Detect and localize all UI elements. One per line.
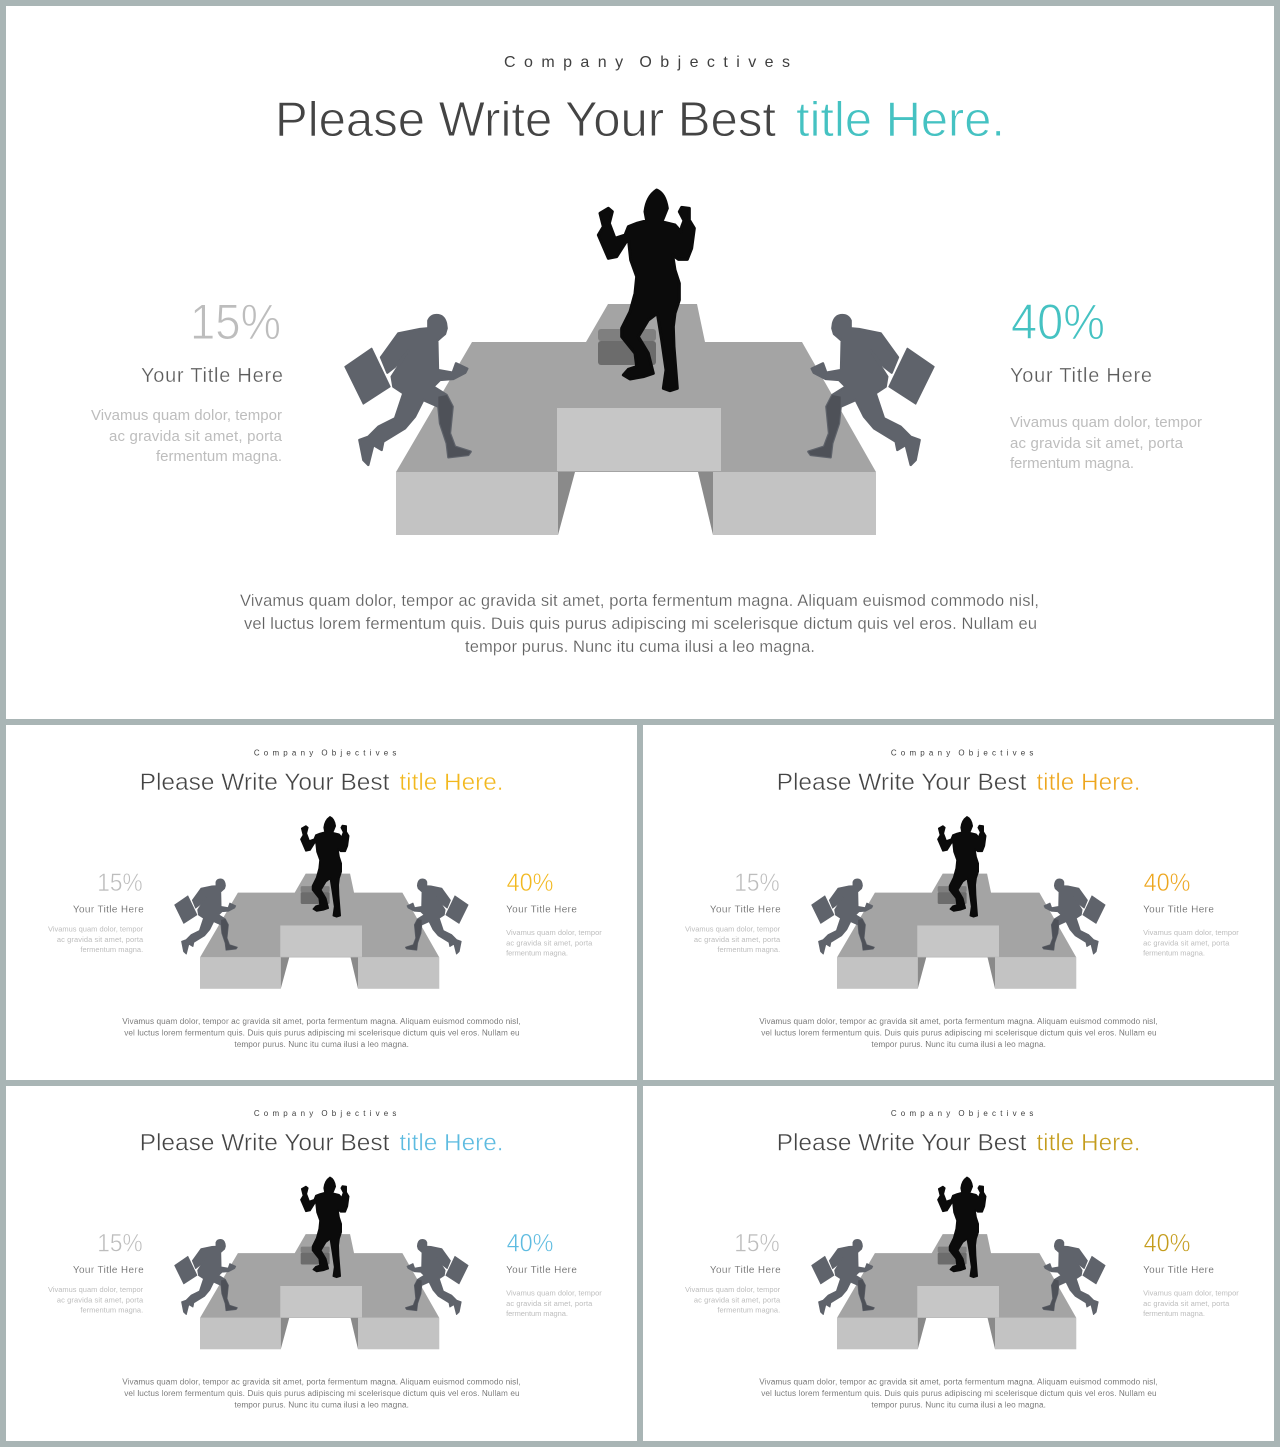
stat right: fermentum magna.: [1143, 948, 1205, 957]
stat right: Vivamus quam dolor, tempor: [1010, 414, 1202, 431]
stat left: Your Title Here: [710, 905, 781, 916]
body text: [759, 1378, 1158, 1410]
body text: tempor purus. Nunc itu cuma ilusi a leo magna.: [234, 1040, 409, 1049]
stat right: Your Title Here: [1143, 1265, 1214, 1276]
body text: Vivamus quam dolor, tempor ac gravida sit amet, porta fermentum magna. Aliquam euismod commodo nisl,: [122, 1017, 521, 1026]
stat left: fermentum magna.: [717, 1305, 780, 1314]
stat left: [48, 869, 144, 954]
stat left: Your Title Here: [73, 1265, 144, 1276]
body text: vel luctus lorem fermentum quis. Duis quis purus adipiscing mi scelerisque dictum quis vel eros. Nullam eu: [124, 1389, 520, 1398]
stat right: ac gravida sit amet, porta: [1010, 435, 1184, 452]
stat left: 15%: [190, 294, 281, 350]
stat left: 15%: [97, 869, 143, 897]
body text: [122, 1378, 521, 1410]
stat right: ac gravida sit amet, porta: [1143, 1299, 1230, 1308]
figure: right runner: [1043, 879, 1105, 954]
stat right: fermentum magna.: [1143, 1309, 1205, 1318]
stat right: ac gravida sit amet, porta: [506, 1299, 593, 1308]
figure: winner: [938, 1177, 986, 1277]
stat left: 15%: [97, 1230, 143, 1258]
figure: left runner: [812, 1240, 874, 1314]
panel: blue variant: [6, 1086, 637, 1441]
stat right: [506, 869, 602, 957]
title: title Here.: [399, 1129, 504, 1156]
stat left: [48, 1230, 144, 1314]
stat left: Vivamus quam dolor, tempor: [685, 924, 781, 933]
stat right: 40%: [1011, 294, 1105, 350]
body text: [759, 1017, 1158, 1049]
eyebrow: Company Objectives: [891, 1109, 1033, 1118]
figure: right runner: [406, 1240, 468, 1314]
stat right: 40%: [507, 869, 553, 897]
figure: left runner: [345, 315, 471, 465]
stat left: fermentum magna.: [717, 945, 780, 954]
stat left: fermentum magna.: [156, 448, 282, 465]
stat left: [685, 1230, 781, 1314]
figure: right runner: [1043, 1240, 1105, 1314]
stat right: Vivamus quam dolor, tempor: [1143, 928, 1239, 937]
stat left: [685, 869, 781, 954]
diagram: stepped platform: [200, 1234, 439, 1349]
figure: right runner: [406, 879, 468, 954]
stat right: Your Title Here: [1143, 905, 1214, 916]
stat right: fermentum magna.: [1010, 455, 1134, 472]
eyebrow: Company Objectives: [254, 1109, 396, 1118]
figure: winner: [598, 190, 694, 391]
body text: vel luctus lorem fermentum quis. Duis quis purus adipiscing mi scelerisque dictum quis vel eros. Nullam eu: [761, 1389, 1157, 1398]
stat right: fermentum magna.: [506, 948, 568, 957]
title: [140, 769, 504, 796]
stat right: Vivamus quam dolor, tempor: [506, 1288, 602, 1297]
body text: Vivamus quam dolor, tempor ac gravida sit amet, porta fermentum magna. Aliquam euismod commodo nisl,: [759, 1378, 1158, 1387]
stat left: fermentum magna.: [80, 1305, 143, 1314]
eyebrow: Company Objectives: [254, 748, 396, 757]
stat right: [506, 1230, 602, 1318]
stat left: ac gravida sit amet, porta: [57, 935, 144, 944]
body text: tempor purus. Nunc itu cuma ilusi a leo magna.: [234, 1401, 409, 1410]
body text: Vivamus quam dolor, tempor ac gravida sit amet, porta fermentum magna. Aliquam euismod commodo nisl,: [759, 1017, 1158, 1026]
stat right: fermentum magna.: [506, 1309, 568, 1318]
stat right: [1143, 869, 1239, 957]
body text: Vivamus quam dolor, tempor ac gravida sit amet, porta fermentum magna. Aliquam euismod commodo nisl,: [240, 592, 1039, 610]
stat left: [91, 294, 283, 465]
stat left: Vivamus quam dolor, tempor: [48, 924, 144, 933]
eyebrow: Company Objectives: [891, 748, 1033, 757]
stat right: Your Title Here: [506, 905, 577, 916]
figure: left runner: [812, 879, 874, 954]
eyebrow: Company Objectives: [504, 54, 790, 71]
diagram: stepped platform: [200, 874, 439, 989]
stat right: Your Title Here: [506, 1265, 577, 1276]
stat left: Your Title Here: [141, 365, 283, 387]
diagram: stepped platform: [837, 1234, 1076, 1349]
title: title Here.: [399, 769, 504, 796]
figure: right runner: [808, 315, 934, 465]
figure: winner: [301, 817, 349, 917]
title: Please Write Your Best: [777, 1129, 1027, 1156]
title: Please Write Your Best: [777, 769, 1027, 796]
stat left: 15%: [734, 1230, 780, 1258]
title: title Here.: [1036, 1129, 1141, 1156]
body text: vel luctus lorem fermentum quis. Duis quis purus adipiscing mi scelerisque dictum quis vel eros. Nullam eu: [124, 1029, 520, 1038]
title: Please Write Your Best: [140, 1129, 390, 1156]
stat right: ac gravida sit amet, porta: [1143, 938, 1230, 947]
stat left: fermentum magna.: [80, 945, 143, 954]
stat left: ac gravida sit amet, porta: [694, 935, 781, 944]
diagram: stepped platform: [837, 874, 1076, 989]
figure: winner: [938, 817, 986, 917]
stat right: 40%: [1144, 869, 1190, 897]
body text: tempor purus. Nunc itu cuma ilusi a leo magna.: [465, 638, 815, 656]
stat left: Vivamus quam dolor, tempor: [48, 1285, 144, 1294]
stat left: Vivamus quam dolor, tempor: [685, 1285, 781, 1294]
stat right: 40%: [1144, 1230, 1190, 1258]
stat right: Vivamus quam dolor, tempor: [1143, 1288, 1239, 1297]
body text: Vivamus quam dolor, tempor ac gravida sit amet, porta fermentum magna. Aliquam euismod commodo nisl,: [122, 1378, 521, 1387]
figure: left runner: [175, 1240, 237, 1314]
body text: [122, 1017, 521, 1049]
title: [777, 1129, 1141, 1156]
body text: vel luctus lorem fermentum quis. Duis quis purus adipiscing mi scelerisque dictum quis vel eros. Nullam eu: [761, 1029, 1157, 1038]
stat right: 40%: [507, 1230, 553, 1258]
stat left: Vivamus quam dolor, tempor: [91, 407, 282, 424]
panel: main slide: [6, 6, 1274, 719]
stat right: ac gravida sit amet, porta: [506, 938, 593, 947]
body text: [240, 592, 1039, 656]
stat right: Your Title Here: [1010, 365, 1152, 387]
title: Please Write Your Best: [140, 769, 390, 796]
diagram: stepped platform: [396, 304, 876, 535]
stat left: ac gravida sit amet, porta: [694, 1295, 781, 1304]
title: Please Write Your Best: [275, 93, 776, 147]
stat left: 15%: [734, 869, 780, 897]
body text: vel luctus lorem fermentum quis. Duis quis purus adipiscing mi scelerisque dictum quis vel eros. Nullam eu: [244, 615, 1037, 633]
stat left: ac gravida sit amet, porta: [57, 1295, 144, 1304]
stat right: [1010, 294, 1202, 472]
stat left: ac gravida sit amet, porta: [109, 428, 283, 445]
panel: gold variant: [643, 1086, 1274, 1441]
title: [777, 769, 1141, 796]
stat right: [1143, 1230, 1239, 1318]
title: [140, 1129, 504, 1156]
title: title Here.: [796, 93, 1005, 147]
title: [275, 93, 1005, 147]
stat left: Your Title Here: [73, 905, 144, 916]
figure: left runner: [175, 879, 237, 954]
panel: yellow variant: [6, 725, 637, 1080]
stat right: Vivamus quam dolor, tempor: [506, 928, 602, 937]
body text: tempor purus. Nunc itu cuma ilusi a leo magna.: [871, 1401, 1046, 1410]
panel: orange variant: [643, 725, 1274, 1080]
body text: tempor purus. Nunc itu cuma ilusi a leo magna.: [871, 1040, 1046, 1049]
figure: winner: [301, 1177, 349, 1277]
stat left: Your Title Here: [710, 1265, 781, 1276]
title: title Here.: [1036, 769, 1141, 796]
